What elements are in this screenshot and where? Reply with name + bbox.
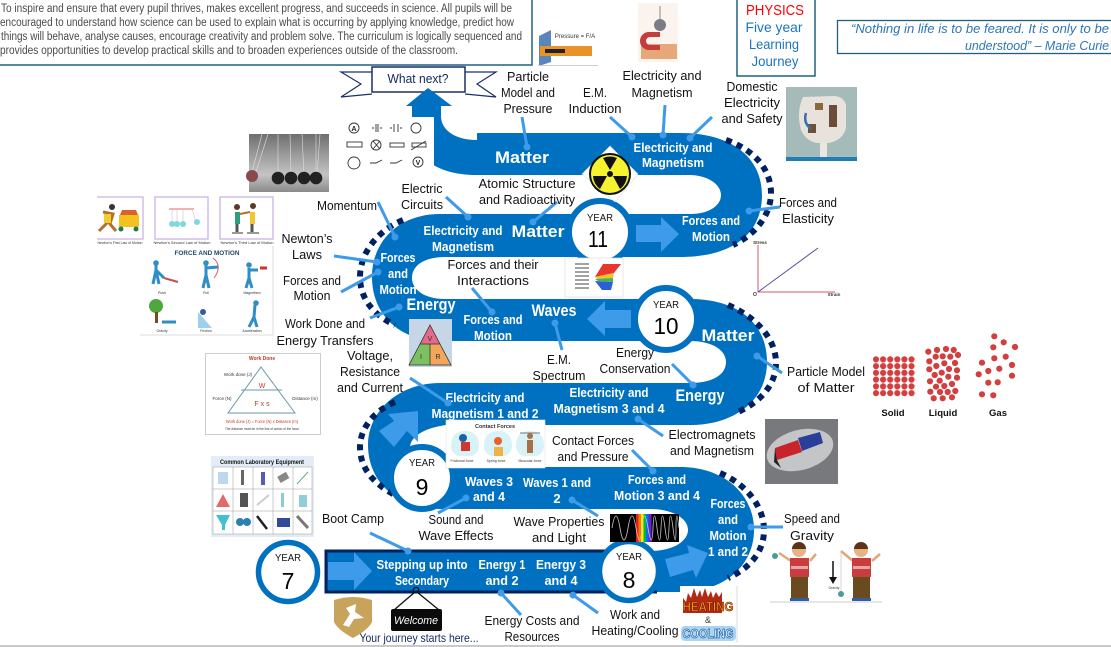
topic labels: centre: Resources [504, 629, 560, 644]
topic labels: top: and Safety [722, 111, 783, 126]
road labels: lower rows: Motion [710, 528, 747, 543]
topic labels: top: Domestic [726, 79, 778, 94]
topic labels: top: Forces and [779, 195, 837, 210]
image: force and motion panel: Pull [203, 291, 209, 295]
image: pressure equals force over area [538, 30, 598, 66]
dotted edge: upper left curve [360, 220, 403, 325]
image: work done triangle: Distance (m) [292, 396, 318, 401]
topic labels: centre: Interactions [457, 273, 530, 288]
image: stress strain graph [753, 240, 841, 298]
image: VIR triangle: I [420, 354, 422, 361]
topic labels: top: Magnetism [632, 85, 692, 100]
road labels: top rows: Energy [406, 295, 456, 314]
quote box: Marie Curie: “Nothing in life is to be feared. It is only to be [851, 21, 1109, 36]
dotted edge: middle right curve [728, 305, 776, 412]
topic labels: right: Speed and [784, 511, 840, 526]
image: welcome sign [391, 587, 442, 631]
road labels: middle rows: Electricity and [570, 385, 649, 400]
image: common laboratory equipment chart [211, 456, 314, 537]
topic labels: top: Model and [501, 85, 555, 100]
image: circuit symbols [341, 117, 434, 182]
dotted edge: lower left curve [360, 402, 395, 495]
image: force and motion panel: Friction [200, 329, 212, 333]
image: force and motion panel: Acceleration [242, 329, 262, 333]
dotted edge: bottom right curve [720, 473, 764, 578]
road labels: lower rows: and 2 [486, 573, 518, 588]
image: plug wiring [786, 87, 857, 161]
arrow: year 7 [328, 552, 372, 590]
year 7 badge: YEAR [275, 553, 301, 564]
topic labels: top: E.M. [583, 85, 607, 100]
image: work done triangle: The distance must be in the line of action of the force [225, 426, 300, 431]
road labels: lower rows: Secondary [395, 573, 450, 588]
topic labels: centre: E.M. [547, 352, 571, 367]
topic labels: left: and Current [337, 380, 403, 395]
year 9 badge: YEAR [409, 458, 435, 469]
arrow: year 10 [587, 301, 631, 336]
road labels: top rows: and [388, 266, 408, 281]
road labels: top rows: Electricity and [424, 223, 503, 238]
road labels: lower rows: and [718, 512, 738, 527]
image: radiation symbol [582, 146, 638, 202]
image: electromagnetic spectrum [565, 258, 623, 297]
image: three Newton's laws cards: Newton's Third Law of Motion [220, 241, 274, 245]
road labels: lower rows [376, 472, 748, 588]
topic labels: left: Laws [292, 247, 322, 262]
callout lines and dots [334, 105, 783, 615]
road labels: top rows: Matter [495, 148, 549, 167]
image: contact forces: Muscular force [519, 459, 542, 463]
topic labels: centre: and Light [532, 530, 586, 545]
road labels: top rows: Magnetism [432, 239, 494, 254]
image: contact forces [446, 420, 545, 468]
image: force and motion panel: FORCE AND MOTION [174, 251, 240, 257]
mission statement box: encouraged to understand how science can be used to explain what is occurring by applying knowledge, predict how [0, 17, 515, 29]
year 11 badge: YEAR [587, 213, 613, 224]
image: newton's cradle [246, 134, 329, 192]
image: force and motion panel [140, 246, 273, 335]
image: work done triangle: F x s [254, 401, 270, 408]
topic labels: left: Forces and [283, 273, 341, 288]
image: heating and cooling [680, 586, 737, 643]
mission statement box: things will behave, analyse causes, encourage creativity and problem solve. The curriculum is logically sequenced and [1, 31, 522, 43]
topic labels: left: Newton’s [282, 231, 333, 246]
image: solid liquid gas particles: Liquid [929, 408, 957, 419]
image: contact forces: Spring force [487, 459, 505, 463]
topic labels: top: Induction [568, 101, 622, 116]
arrow: year 11 [636, 217, 679, 252]
image: work done triangle: Work done (J) = Force (N) x Distance (m) [226, 419, 298, 424]
image: VIR triangle [409, 319, 452, 367]
road labels: top rows: Motion [380, 282, 417, 297]
topic labels: centre: Contact Forces [552, 433, 634, 448]
image: wave with rainbow spectrum [610, 514, 679, 542]
topic labels: top: Electricity and [622, 68, 702, 83]
topic labels: right: Gravity [790, 528, 835, 543]
topic labels: left: Resistance [340, 364, 400, 379]
topic labels: top: Elasticity [782, 211, 834, 226]
year 7 badge [258, 542, 318, 602]
topic labels: centre: Heating/Cooling [592, 623, 678, 638]
title box: Physics five year learning journey: Five year [746, 19, 803, 35]
image: boy with yo-yo, speed and gravity: Gravity [828, 586, 840, 590]
road labels: lower rows: 1 and 2 [708, 544, 748, 559]
road labels: middle rows [432, 301, 755, 421]
road labels: lower rows: and 4 [544, 573, 578, 588]
road labels: top rows: Motion [692, 229, 730, 244]
image: circuit symbols: V [416, 160, 421, 167]
image: solid liquid gas particles: Gas [989, 408, 1007, 419]
image: force and motion panel: Magnetism [243, 291, 261, 295]
image: work done triangle [206, 354, 320, 434]
topic labels: centre: and Pressure [558, 449, 628, 464]
topic labels: top: Electric [402, 181, 443, 196]
image: solid liquid gas particles: Solid [881, 408, 905, 419]
road labels: middle rows: Matter [702, 326, 755, 345]
topic labels: centre: Wave Properties [514, 514, 605, 529]
image: solid liquid gas particles [873, 333, 1018, 419]
topic labels: right: of Matter [798, 380, 855, 395]
image: work done triangle: W [259, 383, 266, 390]
mission statement box: To inspire and ensure that every pupil thrives, makes excellent progress, and succeeds in science. All pupils will be [1, 3, 512, 15]
mission statement box: provides opportunities to develop practical skills and to broaden experiences outside of the classroom. [0, 45, 458, 57]
topic labels: centre: Spectrum [532, 368, 586, 383]
bottom bar border: year 7 straight [326, 551, 657, 592]
road labels: lower rows: 2 [553, 491, 561, 506]
topic labels: centre: Wave Effects [418, 528, 494, 543]
image: work done triangle: Work done (J) [224, 372, 253, 377]
image: contact forces: Contact Forces [475, 424, 515, 430]
image: heating and cooling: HEATING [682, 599, 734, 614]
journey road: blue winding path with arrow [326, 88, 767, 592]
page bottom rule [0, 645, 1111, 647]
image: three Newton's laws cards: Newton's First Law of Motion [98, 241, 143, 245]
arrow: year 9 [379, 411, 418, 447]
image: VIR triangle: R [435, 354, 441, 361]
topic labels: top: Electricity [724, 95, 780, 110]
image: three Newton's laws cards [97, 197, 274, 245]
topic labels: right: and Magnetism [670, 443, 754, 458]
topic labels: centre: Sound and [428, 512, 484, 527]
topic labels: top: Circuits [401, 197, 443, 212]
topic labels: centre: Work and [610, 607, 660, 622]
topic labels: left: Energy Transfers [276, 333, 374, 348]
topic labels: top: Particle [507, 69, 549, 84]
road labels: middle rows: Forces and [464, 312, 523, 327]
image: common laboratory equipment chart: Common Laboratory Equipment [220, 459, 305, 466]
road labels: middle rows: Magnetism 3 and 4 [554, 401, 665, 416]
year 8 badge: YEAR [616, 552, 642, 563]
year 11 badge [569, 201, 631, 263]
image: VIR triangle: V [428, 336, 433, 343]
caption: your journey starts here: Your journey starts here... [360, 631, 478, 645]
road labels: top rows: Magnetism [642, 155, 704, 170]
topic labels: left: Boot Camp [322, 511, 384, 526]
road labels: top rows [380, 140, 740, 314]
year 7 badge: 7 [282, 568, 294, 594]
road labels: lower rows: Stepping up into [376, 557, 468, 572]
road labels: middle rows: Waves [532, 301, 576, 320]
topic labels: left: Voltage, [347, 348, 393, 363]
year 8 badge: 8 [623, 567, 635, 593]
road labels: lower rows: Motion 3 and 4 [614, 488, 701, 503]
image: circuit symbols: A [351, 126, 357, 133]
year 10 badge: YEAR [653, 300, 679, 311]
topic labels: top [401, 68, 837, 226]
road labels: lower rows: Waves 3 [465, 474, 513, 489]
image: heating and cooling: & [705, 615, 711, 625]
road labels: middle rows: Energy [676, 386, 725, 405]
image: welcome sign: Welcome [394, 615, 438, 627]
topic labels: right: Electromagnets [668, 427, 756, 442]
road labels: top rows: Electricity and [634, 140, 713, 155]
image: contact forces: Frictional force [451, 459, 474, 463]
topic labels: right [668, 364, 865, 543]
road labels: lower rows: Energy 1 [478, 557, 526, 572]
road labels: lower rows: Waves 1 and [523, 475, 591, 490]
image: three Newton's laws cards: Newton's Second Law of Motion [154, 241, 211, 245]
topic labels: centre [418, 257, 678, 644]
image: stress strain graph: Strain [828, 292, 841, 297]
topic labels: right: Particle Model [787, 364, 865, 379]
year 10 badge [635, 288, 697, 350]
year 9 badge: 9 [416, 474, 428, 500]
arrow: year 8 [665, 545, 708, 578]
road labels: lower rows: Forces and [628, 472, 686, 487]
title box: Physics five year learning journey [737, 0, 815, 76]
title box: Physics five year learning journey: Learning [749, 36, 799, 52]
road labels: lower rows: Energy 3 [536, 557, 586, 572]
road labels: middle rows: Electricity and [446, 390, 525, 405]
image: school crest shield [334, 597, 372, 638]
image: stress strain graph: Stress [753, 240, 767, 245]
title box: Physics five year learning journey: Journey [752, 53, 798, 69]
image: work done triangle: Force (N) [212, 396, 232, 401]
road labels: top rows: Forces and [682, 213, 740, 228]
topic labels: left: Work Done and [285, 316, 365, 331]
topic labels: centre: Forces and their [448, 257, 539, 272]
banner: what next: What next? [388, 71, 448, 86]
image: heating and cooling: COOLING [682, 626, 734, 641]
image: force and motion panel: Push [158, 291, 166, 295]
banner: what next [341, 67, 496, 97]
topic labels: left [276, 198, 403, 526]
image: electromagnet with steel ball [638, 3, 678, 62]
topic labels: left: Motion [294, 288, 330, 303]
year 11 badge: 11 [588, 226, 608, 252]
topic labels: top: Atomic Structure [478, 176, 576, 191]
topic labels: top: Pressure [504, 101, 552, 116]
topic labels: left: Momentum [317, 198, 377, 213]
road labels: middle rows: Magnetism 1 and 2 [432, 406, 538, 421]
road labels: top rows: Forces [380, 250, 416, 265]
image: stress strain graph: O [753, 292, 757, 298]
image: bar magnet with iron filings [762, 419, 838, 484]
image: boy with yo-yo, speed and gravity [770, 542, 882, 602]
year 9 badge [391, 447, 453, 509]
topic labels: centre: Conservation [600, 361, 670, 376]
year 8 badge [600, 542, 658, 600]
road labels: lower rows: and 4 [473, 489, 506, 504]
image: force and motion panel: Gravity [156, 329, 168, 333]
title box: Physics five year learning journey: PHYSICS [746, 2, 804, 19]
topic labels: centre: Energy Costs and [484, 613, 580, 628]
topic labels: centre: Energy [616, 345, 654, 360]
year 10 badge: 10 [654, 313, 678, 339]
quote box: Marie Curie [838, 20, 1111, 54]
image: pressure equals force over area: Pressure = F/A [555, 34, 595, 40]
dotted edge: top right curve [726, 140, 771, 245]
topic labels: top: and Radioactivity [479, 192, 575, 207]
road labels: middle rows: Motion [474, 328, 512, 343]
mission statement box [0, 0, 532, 65]
image: work done triangle: Work Done [249, 356, 275, 362]
road labels: lower rows: Forces [710, 496, 746, 511]
road labels: top rows: Matter [512, 222, 565, 241]
